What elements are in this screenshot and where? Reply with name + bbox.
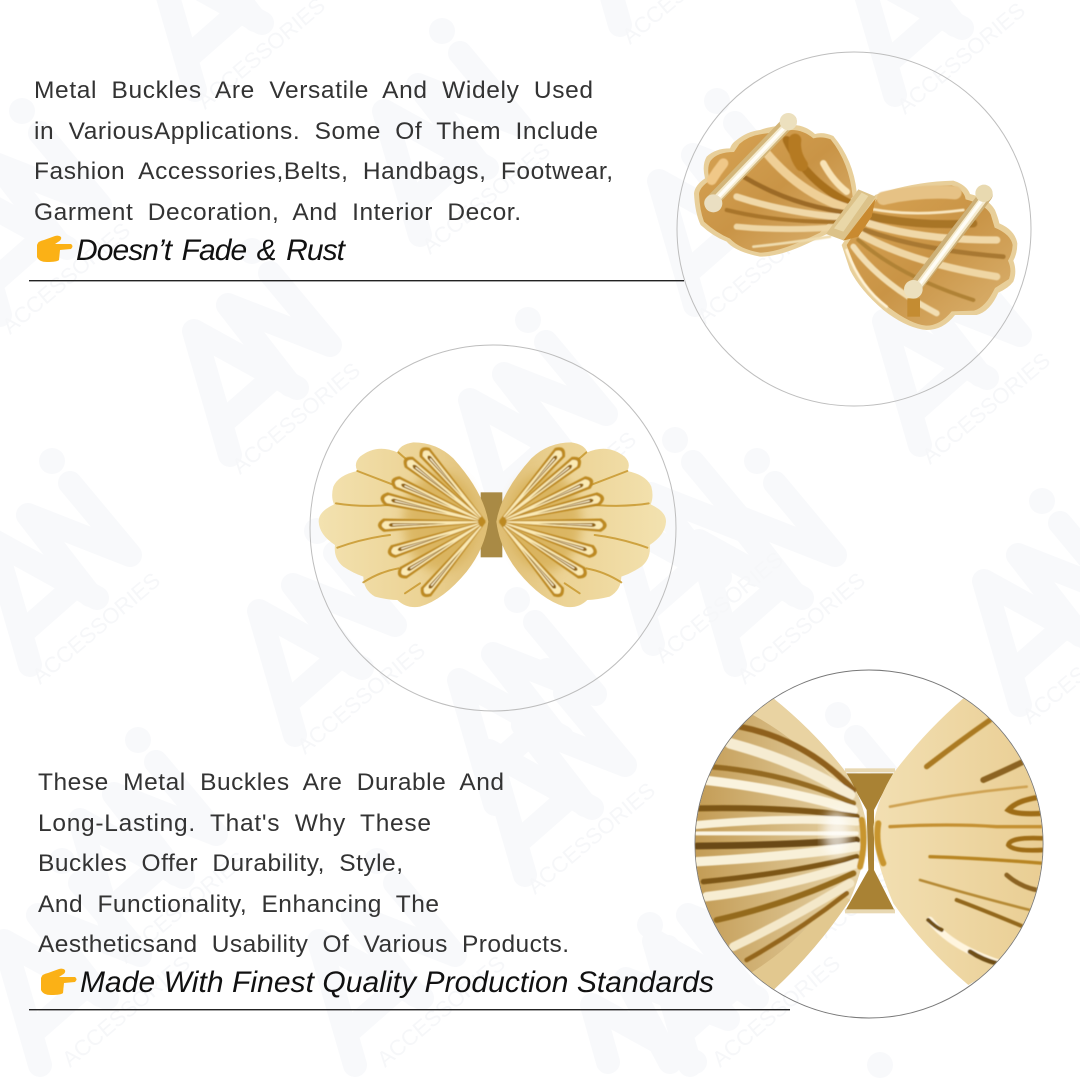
watermark pattern: ACCESSORIES (707, 951, 845, 1072)
text block: bottom description: Long-Lasting. That's Why These (38, 810, 431, 837)
center band (826, 189, 876, 241)
left shell (319, 442, 490, 607)
heading: Doesn't Fade & Rust: Doesn’t Fade & Rust (76, 234, 347, 267)
text block: top description: Fashion Accessories,Belts, Handbags, Footwear, (34, 158, 613, 185)
center plate (845, 768, 895, 913)
circle: close-up buckle photo (690, 670, 1050, 1018)
text block: bottom description: Buckles Offer Durability, Style, (38, 850, 403, 877)
watermark pattern: ACCESSORIES (0, 218, 135, 339)
text block: top description: Garment Decoration, And Interior Decor. (34, 199, 521, 226)
text block: bottom description (38, 769, 569, 958)
watermark pattern: ACCESSORIES (417, 138, 555, 259)
right wedge (873, 698, 1050, 985)
text block: top description: in VariousApplications. Some Of Them Include (34, 118, 598, 145)
left wedge (690, 698, 867, 990)
divider line bottom (29, 1009, 790, 1010)
watermark pattern: ACCESSORIES (227, 358, 365, 479)
center strap (481, 492, 502, 557)
watermark pattern: ACCESSORIES (650, 547, 788, 668)
watermark pattern: ACCESSORIES (917, 348, 1055, 469)
watermark pattern: ACCESSORIES (292, 638, 430, 759)
watermark pattern: ACCESSORIES (892, 0, 1030, 119)
divider line top (29, 280, 684, 281)
watermark pattern: ACCESSORIES (692, 208, 830, 329)
text block: bottom description: And Functionality, Enhancing The (38, 891, 439, 918)
circle: front buckle photo (310, 345, 676, 711)
text block: top description: Metal Buckles Are Versatile And Widely Used (34, 77, 593, 104)
left bar (704, 113, 797, 212)
text block: top description (34, 77, 613, 226)
text block: bottom description: Aestheticsand Usability Of Various Products. (38, 931, 569, 958)
heading: Made With Finest Quality Production Standards: Made With Finest Quality Production Standards (80, 966, 714, 999)
watermark pattern: ACCESSORIES (732, 568, 870, 689)
right shell (495, 442, 666, 607)
watermark pattern: ACCESSORIES (372, 951, 510, 1072)
watermark pattern: ACCESSORIES (27, 568, 165, 689)
left shell (694, 125, 857, 257)
watermark pattern: ACCESSORIES (503, 427, 641, 548)
right bar (904, 185, 993, 317)
text block: bottom description: These Metal Buckles Are Durable And (38, 769, 504, 796)
watermark pattern: ACCESSORIES (113, 847, 251, 968)
icon: pointing hand bottom (41, 969, 76, 995)
circle: angled buckle photo (677, 52, 1031, 406)
watermark pattern: ACCESSORIES (57, 951, 195, 1072)
watermark pattern: ACCESSORIES (522, 778, 660, 899)
watermark pattern: ACCESSORIES (813, 822, 951, 943)
icon: pointing hand top (37, 236, 72, 262)
right shell (842, 181, 1017, 330)
